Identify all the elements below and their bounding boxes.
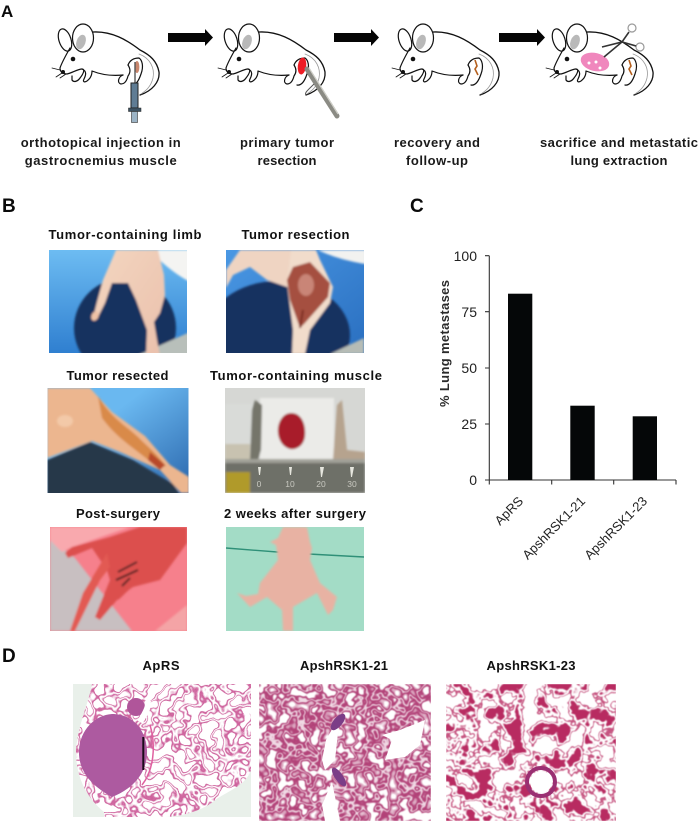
title: ApshRSK1-21: ApshRSK1-21 <box>300 658 388 673</box>
panel B: surgery photographs <box>2 196 382 631</box>
caption step 2 <box>240 135 334 168</box>
title: post-surgery: Post-surgery <box>76 506 161 521</box>
title: ApRS: ApRS <box>142 658 180 673</box>
title: ApshRSK1-23: ApshRSK1-23 <box>486 658 576 673</box>
ruler numbers: 0 <box>257 479 262 489</box>
title: tumor-containing muscle: Tumor-containing muscle <box>210 368 382 383</box>
mouse 3 recovery <box>392 24 499 95</box>
mouse 1 with syringe injection <box>52 24 159 122</box>
title: 2 weeks after surgery: 2 weeks after surgery <box>224 506 367 521</box>
panel label A: A <box>1 2 13 21</box>
y axis title: % Lung metastases <box>437 280 452 407</box>
y axis numbers: 100 <box>454 248 477 264</box>
x axis labels: ApshRSK1-23 <box>581 494 650 562</box>
axes <box>485 256 676 484</box>
panel label B: B <box>2 196 16 217</box>
ruler numbers: 10 <box>285 479 295 489</box>
vessels <box>330 714 346 786</box>
caption step 1: orthotopical injection in <box>21 135 181 150</box>
caption step 4: sacrifice and metastatic <box>540 135 698 150</box>
icon: lung with metastases <box>579 50 611 74</box>
title: tumor-containing limb: Tumor-containing limb <box>48 227 202 242</box>
icon: scissors <box>602 24 644 57</box>
y axis numbers: 50 <box>461 360 477 376</box>
ruler numbers <box>257 481 356 487</box>
bar: ApRS 83 <box>508 294 532 480</box>
caption step 4: lung extraction <box>570 153 668 168</box>
y axis numbers: 75 <box>461 304 477 320</box>
y axis numbers <box>454 248 477 488</box>
bar: ApshRSK1-23 28 <box>633 416 657 480</box>
icon: red tumor <box>297 57 307 75</box>
y axis numbers: 0 <box>469 472 477 488</box>
x axis labels <box>491 493 650 562</box>
mouse 2 with tumor resection <box>218 24 338 116</box>
caption step 3: recovery and <box>394 135 480 150</box>
photo: tumor resected <box>47 388 189 495</box>
x axis labels: ApshRSK1-21 <box>519 494 588 562</box>
arrow 2 <box>334 29 379 46</box>
photo: tumor resection <box>226 250 364 353</box>
caption step 2: resection <box>258 153 317 168</box>
icon: syringe <box>128 62 141 122</box>
arrow 3 <box>499 29 545 46</box>
panel label C: C <box>410 196 424 217</box>
photo: tumor-containing muscle <box>225 388 365 493</box>
caption step 2: primary tumor <box>240 135 334 150</box>
y axis numbers: 25 <box>461 416 477 432</box>
caption step 1: gastrocnemius muscle <box>25 153 177 168</box>
caption step 3: follow-up <box>406 153 468 168</box>
title: tumor resected: Tumor resected <box>66 368 169 383</box>
mouse 4 lung extraction <box>546 24 653 95</box>
icon: injected muscle <box>135 61 139 73</box>
caption step 3 <box>394 135 480 168</box>
photo: tumor-containing limb <box>49 250 187 353</box>
photo: 2 weeks after surgery <box>226 527 364 631</box>
caption step 4 <box>540 135 698 168</box>
histology: ApRS with metastatic nodule <box>73 684 251 817</box>
panel D: lung histology <box>2 646 616 821</box>
photo: post-surgery <box>50 527 187 631</box>
x axis labels: ApRS <box>491 493 526 528</box>
panel C: lung metastases bar chart <box>410 196 676 562</box>
arrow 1 <box>168 29 213 46</box>
airways <box>322 715 425 821</box>
histology: ApshRSK1-23 <box>446 684 616 821</box>
ruler numbers: 20 <box>316 479 326 489</box>
title: tumor resection: Tumor resection <box>242 227 350 242</box>
bar: ApshRSK1-21 33 <box>570 406 595 480</box>
icon: forceps <box>305 68 338 116</box>
histology: ApshRSK1-21 <box>259 684 431 821</box>
caption step 1 <box>21 135 181 168</box>
panel label D: D <box>2 646 16 667</box>
panel A: experimental timeline <box>1 2 698 168</box>
ruler numbers: 30 <box>347 479 357 489</box>
